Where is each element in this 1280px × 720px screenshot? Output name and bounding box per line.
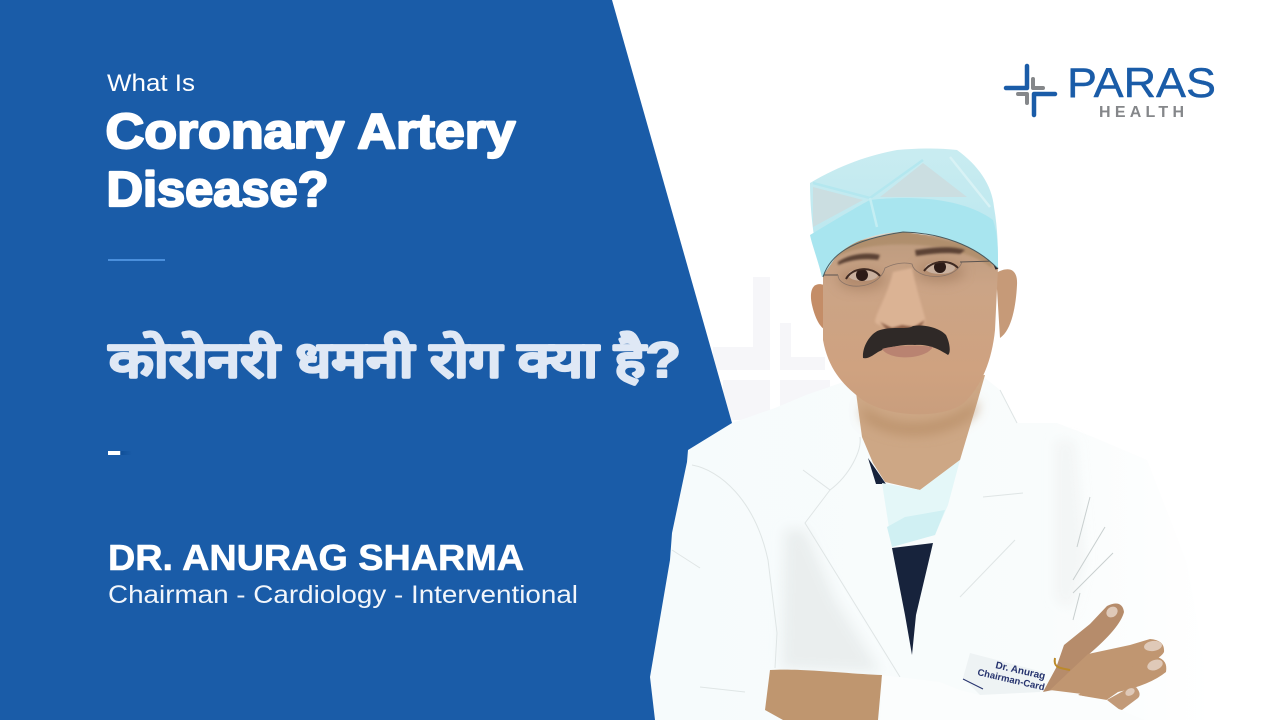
lips [882, 346, 933, 357]
doctor illustration [650, 148, 1213, 720]
badge piping [963, 679, 983, 689]
neck [855, 375, 985, 490]
badge title: Chairman-Card [976, 667, 1046, 693]
title line one: Coronary Artery [106, 105, 516, 159]
finger two [1050, 639, 1164, 695]
surgical cap [810, 148, 998, 277]
watermark: faint cross behind doctor [713, 277, 830, 420]
title line two: Disease? [106, 163, 328, 217]
finger three [1078, 657, 1166, 701]
ears [811, 269, 1017, 338]
white coat [650, 378, 1213, 720]
coat dark creases [1073, 497, 1113, 620]
scrub undershirt patch [868, 458, 886, 484]
ring [1055, 658, 1070, 670]
cap folds [813, 157, 990, 227]
glasses [822, 260, 997, 286]
finger four [1105, 687, 1140, 710]
coat fold lines [672, 390, 1023, 692]
face [823, 232, 998, 414]
cap band [810, 198, 998, 277]
fingernails [1104, 604, 1164, 698]
small dash accent [108, 451, 132, 455]
panel: blue diagonal background [0, 0, 732, 720]
left forearm [765, 670, 882, 720]
badge name: Dr. Anurag [994, 660, 1046, 682]
coat soft shading [782, 440, 1085, 672]
scrub v-neck [892, 543, 933, 655]
cap grey facets [813, 163, 967, 227]
presenter credit [108, 537, 578, 609]
eyebrows [838, 247, 965, 265]
heading block: English title [106, 70, 516, 217]
logo: Paras Health [1006, 59, 1216, 121]
nostrils [880, 320, 925, 331]
eye socket shadow [838, 262, 964, 290]
mask lower fold [887, 510, 945, 547]
finger one [1043, 604, 1124, 692]
logo wordmark: PARAS [1067, 59, 1216, 106]
surgical mask at neck [882, 460, 960, 547]
eyes [846, 261, 958, 281]
right sleeve [880, 675, 1145, 720]
heading: Hindi title: कोरोनरी धमनी रोग क्या है? [108, 331, 681, 388]
right hand [1043, 604, 1166, 710]
doctor name: DR. ANURAG SHARMA [108, 537, 524, 578]
mustache [863, 325, 950, 358]
divider under title [108, 259, 165, 261]
logo subtext: HEALTH [1099, 104, 1184, 121]
forehead shadow [830, 230, 992, 268]
text: what is: What Is [107, 70, 195, 97]
doctor designation: Chairman - Cardiology - Interventional [108, 581, 578, 609]
icon: logo cross [1006, 66, 1055, 115]
chin shadow on neck [862, 400, 978, 434]
nose [875, 268, 926, 328]
coat name badge [963, 653, 1046, 695]
cap hem line [823, 232, 997, 277]
